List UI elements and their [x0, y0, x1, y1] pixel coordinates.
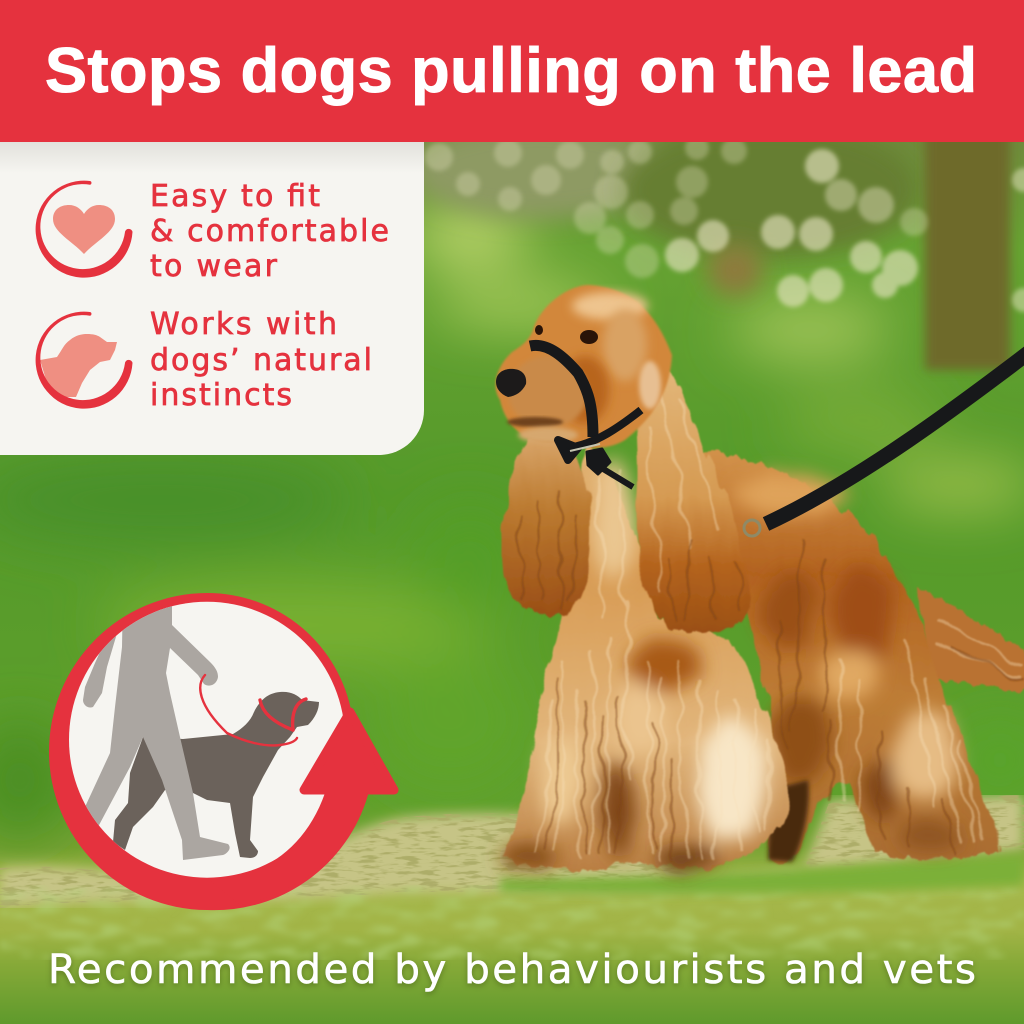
header banner	[0, 0, 1024, 142]
text: natural instincts: dogs’ natural	[150, 343, 372, 378]
white disc	[69, 602, 345, 878]
foreground grass	[0, 885, 1024, 960]
eyes	[535, 325, 598, 344]
text: natural instincts: instincts	[150, 378, 292, 413]
text: easy to fit: & comfortable	[150, 214, 389, 249]
text: natural instincts: Works with	[150, 307, 337, 342]
grass light and shadow patches	[0, 203, 1024, 840]
badge: walking a dog on a head collar	[49, 590, 394, 910]
title: Stops dogs pulling on the lead	[45, 36, 977, 106]
red lead and halter	[200, 675, 306, 745]
head	[496, 285, 672, 448]
text: easy to fit: Easy to fit	[150, 179, 320, 214]
arrow tail band	[207, 793, 368, 905]
left ear	[502, 438, 591, 616]
rear body	[700, 450, 1000, 862]
dog photo: cocker spaniel with head collar	[496, 285, 1024, 870]
dog silhouette	[113, 692, 319, 858]
dark inner front leg	[768, 780, 809, 862]
panel: benefits	[0, 142, 424, 455]
arrow head	[304, 712, 394, 790]
background trees and bokeh	[410, 122, 1024, 370]
tail	[918, 590, 1024, 692]
body shading	[735, 475, 965, 851]
lead	[744, 350, 1024, 536]
icon: heart in ring	[36, 181, 133, 278]
red ring	[49, 593, 368, 910]
coat highlights	[502, 460, 768, 869]
text: easy to fit: to wear	[150, 249, 278, 284]
illustration: dog and walker	[83, 590, 319, 860]
chest and front coat	[500, 440, 790, 870]
grass at the dog's feet	[500, 855, 1024, 894]
walker silhouette	[83, 590, 230, 860]
gravel path	[0, 795, 1024, 908]
icon: dog in ring	[36, 312, 133, 409]
head collar	[530, 345, 641, 487]
right ear	[635, 360, 752, 633]
nose	[496, 369, 526, 397]
fur strands	[519, 380, 1024, 860]
footer text: Recommended by behaviourists and vets	[48, 945, 976, 993]
head shading	[507, 292, 661, 443]
